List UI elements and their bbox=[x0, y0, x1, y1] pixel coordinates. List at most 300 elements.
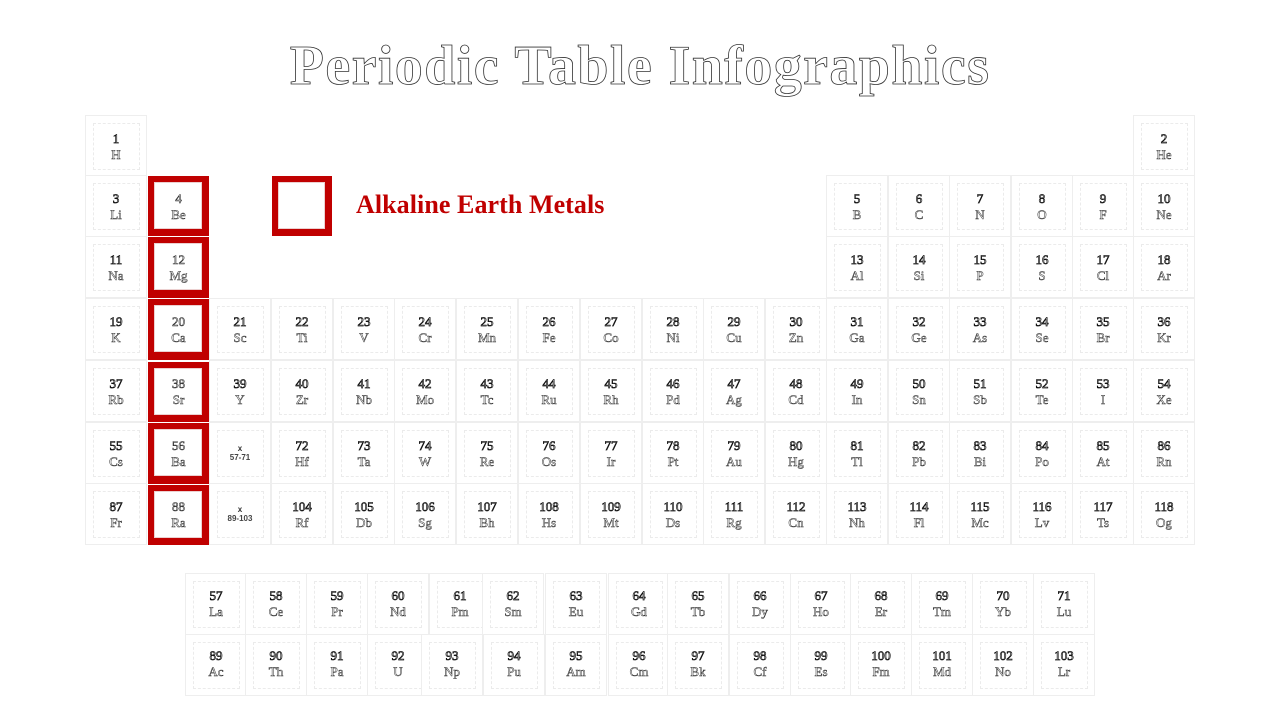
element: Ni: 28 bbox=[666, 314, 680, 329]
element: Db bbox=[333, 483, 395, 545]
element: Be: Be bbox=[171, 207, 186, 222]
element: Y: 39 bbox=[234, 376, 246, 391]
element: Sm: Sm bbox=[504, 604, 522, 619]
element: Th: 90 bbox=[270, 648, 282, 663]
element: Tm bbox=[911, 573, 973, 635]
element: Mo: 42 bbox=[418, 376, 432, 391]
element: Ts: Ts bbox=[1097, 515, 1109, 530]
element: Ta: Ta bbox=[358, 454, 370, 469]
element: Ge: 32 bbox=[912, 314, 926, 329]
element: Zn: Zn bbox=[789, 330, 803, 345]
element: Ca: Ca bbox=[171, 330, 186, 345]
element: In bbox=[826, 360, 888, 422]
element: O: 8 bbox=[1039, 191, 1045, 206]
element: Si: 14 bbox=[912, 252, 926, 267]
element: Lu: Lu bbox=[1057, 604, 1071, 619]
element: No: No bbox=[995, 664, 1011, 679]
element: C bbox=[888, 175, 950, 237]
element: Hs: Hs bbox=[542, 515, 556, 530]
element: Xe: 54 bbox=[1158, 376, 1170, 391]
element: Li: 3 bbox=[113, 191, 119, 206]
element: Hs bbox=[518, 483, 580, 545]
element: Ir: 77 bbox=[604, 438, 618, 453]
element: Ta: 73 bbox=[358, 438, 370, 453]
element: Bh: 107 bbox=[477, 499, 497, 514]
element: Os: Os bbox=[542, 454, 556, 469]
element: Mo: Mo bbox=[416, 392, 434, 407]
element: O: O bbox=[1037, 207, 1047, 222]
element: Am: 95 bbox=[570, 648, 582, 663]
element: Md bbox=[911, 634, 973, 696]
element: Hg: Hg bbox=[788, 454, 804, 469]
element: Kr: Kr bbox=[1157, 330, 1171, 345]
element: Nd bbox=[367, 573, 429, 635]
element: Gd: 64 bbox=[632, 588, 646, 603]
element: I bbox=[1072, 360, 1134, 422]
element: Fr: 87 bbox=[110, 499, 122, 514]
element: Rb bbox=[85, 360, 147, 422]
element: Am bbox=[545, 634, 607, 696]
element: Eu: 63 bbox=[570, 588, 582, 603]
element: Po: Po bbox=[1035, 454, 1049, 469]
element: Sn: Sn bbox=[912, 392, 926, 407]
element: Pm bbox=[429, 573, 491, 635]
element: Ar bbox=[1133, 236, 1195, 298]
element: Pt: Pt bbox=[668, 454, 678, 469]
element: Cn: Cn bbox=[788, 515, 804, 530]
element: P: 15 bbox=[974, 252, 986, 267]
element: Nd: Nd bbox=[390, 604, 406, 619]
element: W: W bbox=[419, 454, 431, 469]
element: Rh bbox=[580, 360, 642, 422]
element: Np bbox=[421, 634, 483, 696]
element: As: As bbox=[973, 330, 987, 345]
element: Fr bbox=[85, 483, 147, 545]
element: Mt bbox=[580, 483, 642, 545]
element: Nd: 60 bbox=[392, 588, 404, 603]
element: Ge: Ge bbox=[911, 330, 927, 345]
element: Fl: Fl bbox=[914, 515, 924, 530]
element: W bbox=[394, 422, 456, 484]
element: Os: 76 bbox=[542, 438, 556, 453]
element: Ac: 89 bbox=[210, 648, 222, 663]
element: I: I bbox=[1101, 392, 1105, 407]
element: Lr bbox=[1033, 634, 1095, 696]
element: As: 33 bbox=[974, 314, 986, 329]
element: W: 74 bbox=[418, 438, 432, 453]
element: Rg: 111 bbox=[725, 499, 743, 514]
element: Og bbox=[1133, 483, 1195, 545]
element: Eu: Eu bbox=[569, 604, 583, 619]
element: Hg bbox=[765, 422, 827, 484]
element: V: V bbox=[359, 330, 369, 345]
element: Sb: Sb bbox=[973, 392, 987, 407]
element: He bbox=[1133, 115, 1195, 177]
element: Gd: Gd bbox=[631, 604, 647, 619]
element: Re: 75 bbox=[480, 438, 494, 453]
element: Br: Br bbox=[1096, 330, 1110, 345]
element: Cd: 48 bbox=[790, 376, 802, 391]
element: Mt: 109 bbox=[601, 499, 621, 514]
element: Dy bbox=[729, 573, 791, 635]
element: C: 6 bbox=[916, 191, 922, 206]
element: Sb bbox=[949, 360, 1011, 422]
element: Th: Th bbox=[269, 664, 283, 679]
element: Cm bbox=[608, 634, 670, 696]
element: Al: 13 bbox=[850, 252, 864, 267]
element: V: 23 bbox=[358, 314, 370, 329]
element: Eu bbox=[545, 573, 607, 635]
element: Bk: 97 bbox=[692, 648, 704, 663]
element: Cr: Cr bbox=[418, 330, 432, 345]
element: Ru: 44 bbox=[542, 376, 556, 391]
element: Np: Np bbox=[444, 664, 460, 679]
element: Rn: 86 bbox=[1158, 438, 1170, 453]
element: Ga: 31 bbox=[850, 314, 864, 329]
element: Hf: Hf bbox=[295, 454, 309, 469]
legend: swatch bbox=[272, 176, 332, 236]
element: Fl bbox=[888, 483, 950, 545]
element: H: 1 bbox=[113, 131, 119, 146]
element: Nb: 41 bbox=[358, 376, 370, 391]
element: Og: Og bbox=[1156, 515, 1172, 530]
element: Br bbox=[1072, 298, 1134, 360]
element: Cf bbox=[729, 634, 791, 696]
element: Sg bbox=[394, 483, 456, 545]
element: Sm: 62 bbox=[506, 588, 520, 603]
element: Fe: Fe bbox=[542, 330, 556, 345]
element: Br: 35 bbox=[1096, 314, 1110, 329]
element: Re: Re bbox=[480, 454, 494, 469]
element: Og: 118 bbox=[1154, 499, 1174, 514]
element: Mc bbox=[949, 483, 1011, 545]
element: Nb bbox=[333, 360, 395, 422]
element: Mn bbox=[456, 298, 518, 360]
element: Rh: Rh bbox=[603, 392, 619, 407]
element: Fl: 114 bbox=[909, 499, 929, 514]
element: Hf bbox=[271, 422, 333, 484]
element: Ni: Ni bbox=[666, 330, 680, 345]
element: Sn bbox=[888, 360, 950, 422]
element: U: 92 bbox=[392, 648, 404, 663]
element: Na: 11 bbox=[110, 252, 122, 267]
element: Ga bbox=[826, 298, 888, 360]
title: Periodic Table Infographics bbox=[290, 35, 990, 97]
element: Cs: 55 bbox=[110, 438, 122, 453]
element: No bbox=[972, 634, 1034, 696]
element: Rg bbox=[703, 483, 765, 545]
element: H bbox=[85, 115, 147, 177]
element: Fe: 26 bbox=[542, 314, 556, 329]
element: Li: Li bbox=[110, 207, 122, 222]
element: Se: 34 bbox=[1036, 314, 1048, 329]
element: Yb: 70 bbox=[996, 588, 1010, 603]
element: Na: Na bbox=[108, 268, 124, 283]
element: Kr: 36 bbox=[1158, 314, 1170, 329]
element: S: S bbox=[1038, 268, 1046, 283]
element: C: C bbox=[915, 207, 923, 222]
element: Lv: Lv bbox=[1035, 515, 1049, 530]
element: Ds: Ds bbox=[666, 515, 680, 530]
element: Mn: 25 bbox=[480, 314, 494, 329]
element: N bbox=[949, 175, 1011, 237]
element: Cr: 24 bbox=[418, 314, 432, 329]
element: Ag: 47 bbox=[728, 376, 740, 391]
legend: label: Alkaline Earth Metals bbox=[356, 190, 604, 219]
element: V bbox=[333, 298, 395, 360]
element: Pu: 94 bbox=[508, 648, 520, 663]
element: Gd bbox=[608, 573, 670, 635]
element: Hg: 80 bbox=[790, 438, 802, 453]
element: Ts: 117 bbox=[1093, 499, 1113, 514]
element: He: He bbox=[1156, 147, 1172, 162]
element: Cm: Cm bbox=[630, 664, 648, 679]
element: Tm: Tm bbox=[933, 604, 951, 619]
element: Tb bbox=[667, 573, 729, 635]
element: Lr: Lr bbox=[1058, 664, 1070, 679]
element: Cr bbox=[394, 298, 456, 360]
element: Se bbox=[1011, 298, 1073, 360]
element: B bbox=[826, 175, 888, 237]
element: Au bbox=[703, 422, 765, 484]
element: Lr: 103 bbox=[1054, 648, 1074, 663]
element: He: 2 bbox=[1161, 131, 1167, 146]
element: At: 85 bbox=[1096, 438, 1110, 453]
element: Cd: Cd bbox=[788, 392, 804, 407]
element: Rh: 45 bbox=[604, 376, 618, 391]
element: Tc: Tc bbox=[481, 392, 493, 407]
element: N: 7 bbox=[977, 191, 983, 206]
element: Rg: Rg bbox=[726, 515, 742, 530]
element: Bk: Bk bbox=[690, 664, 706, 679]
element: Ir: Ir bbox=[607, 454, 615, 469]
element: Ca: 20 bbox=[172, 314, 185, 329]
element: La: La bbox=[209, 604, 223, 619]
element: Sg: Sg bbox=[418, 515, 432, 530]
element: Ti bbox=[271, 298, 333, 360]
element: Pr: Pr bbox=[331, 604, 343, 619]
element: Md: 101 bbox=[932, 648, 952, 663]
element: Rn: Rn bbox=[1156, 454, 1172, 469]
element: S bbox=[1011, 236, 1073, 298]
element: Tb: Tb bbox=[691, 604, 705, 619]
element: Tl bbox=[826, 422, 888, 484]
element: Po bbox=[1011, 422, 1073, 484]
element: O bbox=[1011, 175, 1073, 237]
element: Hs: 108 bbox=[539, 499, 559, 514]
element: Ti: Ti bbox=[296, 330, 308, 345]
element: Zr: 40 bbox=[296, 376, 308, 391]
element: Pb: Pb bbox=[912, 454, 926, 469]
element: Ag: Ag bbox=[726, 392, 742, 407]
element: Ra: 88 bbox=[172, 499, 185, 514]
element: Cn bbox=[765, 483, 827, 545]
element: Mg: 12 bbox=[172, 252, 185, 267]
element: Th bbox=[245, 634, 307, 696]
element: Mc: Mc bbox=[971, 515, 989, 530]
element: K bbox=[85, 298, 147, 360]
element: Cs bbox=[85, 422, 147, 484]
element: Si bbox=[888, 236, 950, 298]
element: Ra bbox=[148, 485, 209, 545]
element: K: K bbox=[111, 330, 121, 345]
element: Nh bbox=[826, 483, 888, 545]
element: Se: Se bbox=[1036, 330, 1048, 345]
element: Po: 84 bbox=[1036, 438, 1048, 453]
element: Cf: Cf bbox=[754, 664, 766, 679]
element: Ho: 67 bbox=[814, 588, 828, 603]
element: Cl bbox=[1072, 236, 1134, 298]
element: Mn: Mn bbox=[478, 330, 496, 345]
element: Ba bbox=[148, 423, 209, 484]
element: Cs: Cs bbox=[109, 454, 123, 469]
element: Mo bbox=[394, 360, 456, 422]
element: actinide placeholder: 89-103 bbox=[228, 514, 252, 523]
element: Cn: 112 bbox=[786, 499, 806, 514]
element: Bi: Bi bbox=[974, 454, 986, 469]
element: Ba: Ba bbox=[171, 454, 186, 469]
element: Pt bbox=[642, 422, 704, 484]
element: Mg bbox=[148, 237, 209, 298]
element: F bbox=[1072, 175, 1134, 237]
element: Al: Al bbox=[850, 268, 864, 283]
element: actinide placeholder: x bbox=[238, 505, 242, 514]
element: Zn bbox=[765, 298, 827, 360]
element: P bbox=[949, 236, 1011, 298]
element: Xe bbox=[1133, 360, 1195, 422]
element: Sc: Sc bbox=[234, 330, 246, 345]
element: Pm: Pm bbox=[451, 604, 469, 619]
element: Ce: Ce bbox=[269, 604, 283, 619]
element: Rf: 104 bbox=[292, 499, 312, 514]
element: Tb: 65 bbox=[692, 588, 704, 603]
element: Li bbox=[85, 175, 147, 237]
element: Bh: Bh bbox=[479, 515, 495, 530]
element: Yb bbox=[972, 573, 1034, 635]
element: Cl: Cl bbox=[1097, 268, 1109, 283]
element: Es bbox=[790, 634, 852, 696]
element: Dy: Dy bbox=[752, 604, 768, 619]
element: Si: Si bbox=[914, 268, 924, 283]
element: Cu bbox=[703, 298, 765, 360]
element: Ir bbox=[580, 422, 642, 484]
element: Fr: Fr bbox=[110, 515, 122, 530]
element: Tc: 43 bbox=[480, 376, 494, 391]
element: Ho bbox=[790, 573, 852, 635]
element: Co: 27 bbox=[604, 314, 618, 329]
element: Mt: Mt bbox=[603, 515, 619, 530]
element: Hf: 72 bbox=[296, 438, 308, 453]
element: Pr: 59 bbox=[330, 588, 344, 603]
element: Te: Te bbox=[1036, 392, 1048, 407]
element: Cm: 96 bbox=[632, 648, 646, 663]
element: Tc bbox=[456, 360, 518, 422]
element: Co: Co bbox=[603, 330, 619, 345]
element: U bbox=[367, 634, 429, 696]
element: Md: Md bbox=[933, 664, 951, 679]
element: Pu bbox=[483, 634, 545, 696]
element: Pb bbox=[888, 422, 950, 484]
element: Te bbox=[1011, 360, 1073, 422]
element: Am: Am bbox=[566, 664, 586, 679]
element: F: F bbox=[1099, 207, 1107, 222]
element: Ca bbox=[148, 299, 209, 360]
element: Bh bbox=[456, 483, 518, 545]
element: B: 5 bbox=[854, 191, 860, 206]
element: Bi: 83 bbox=[974, 438, 986, 453]
element: Au: Au bbox=[726, 454, 742, 469]
element: Tl: Tl bbox=[851, 454, 863, 469]
element: Ta bbox=[333, 422, 395, 484]
element: Er: 68 bbox=[874, 588, 888, 603]
element: N: N bbox=[975, 207, 985, 222]
element: Ac bbox=[185, 634, 247, 696]
element: Sg: 106 bbox=[415, 499, 435, 514]
element: Ne bbox=[1133, 175, 1195, 237]
element: At bbox=[1072, 422, 1134, 484]
element: Ge bbox=[888, 298, 950, 360]
element: Bk bbox=[667, 634, 729, 696]
element: H: H bbox=[111, 147, 121, 162]
element: Ti: 22 bbox=[296, 314, 308, 329]
element: Pd bbox=[642, 360, 704, 422]
element: Lu bbox=[1033, 573, 1095, 635]
element: Nh: Nh bbox=[849, 515, 865, 530]
element: Sr: Sr bbox=[173, 392, 184, 407]
element: Au: 79 bbox=[728, 438, 740, 453]
element: At: At bbox=[1096, 454, 1110, 469]
element: Ra: Ra bbox=[171, 515, 186, 530]
element: P: P bbox=[976, 268, 984, 283]
element: Cu: 29 bbox=[728, 314, 740, 329]
element: As bbox=[949, 298, 1011, 360]
element: Cf: 98 bbox=[754, 648, 766, 663]
element: Sr: 38 bbox=[172, 376, 185, 391]
element: Lv bbox=[1011, 483, 1073, 545]
element: Ga: Ga bbox=[849, 330, 865, 345]
element: Ni bbox=[642, 298, 704, 360]
element: I: 53 bbox=[1096, 376, 1110, 391]
element: Np: 93 bbox=[446, 648, 458, 663]
element: Mg: Mg bbox=[169, 268, 188, 283]
element: Fm bbox=[850, 634, 912, 696]
element: Rn bbox=[1133, 422, 1195, 484]
element: Be: 4 bbox=[175, 191, 182, 206]
element: Sb: 51 bbox=[974, 376, 986, 391]
element: U: U bbox=[393, 664, 403, 679]
element: Al bbox=[826, 236, 888, 298]
element: Pu: Pu bbox=[507, 664, 521, 679]
element: La: 57 bbox=[210, 588, 222, 603]
element: B: B bbox=[853, 207, 861, 222]
element: Zr: Zr bbox=[296, 392, 308, 407]
element: Ne: 10 bbox=[1158, 191, 1170, 206]
element: In: In bbox=[852, 392, 862, 407]
element: Ar: 18 bbox=[1158, 252, 1170, 267]
element: Pa: 91 bbox=[330, 648, 344, 663]
element: Rb: 37 bbox=[110, 376, 122, 391]
element: Tm: 69 bbox=[936, 588, 948, 603]
element: No: 102 bbox=[993, 648, 1013, 663]
element: lanthanide placeholder bbox=[209, 422, 271, 484]
element: Te: 52 bbox=[1036, 376, 1048, 391]
element: K: 19 bbox=[110, 314, 122, 329]
element: Fe bbox=[518, 298, 580, 360]
element: Rb: Rb bbox=[108, 392, 124, 407]
element: Cd bbox=[765, 360, 827, 422]
element: Zr bbox=[271, 360, 333, 422]
element: Bi bbox=[949, 422, 1011, 484]
